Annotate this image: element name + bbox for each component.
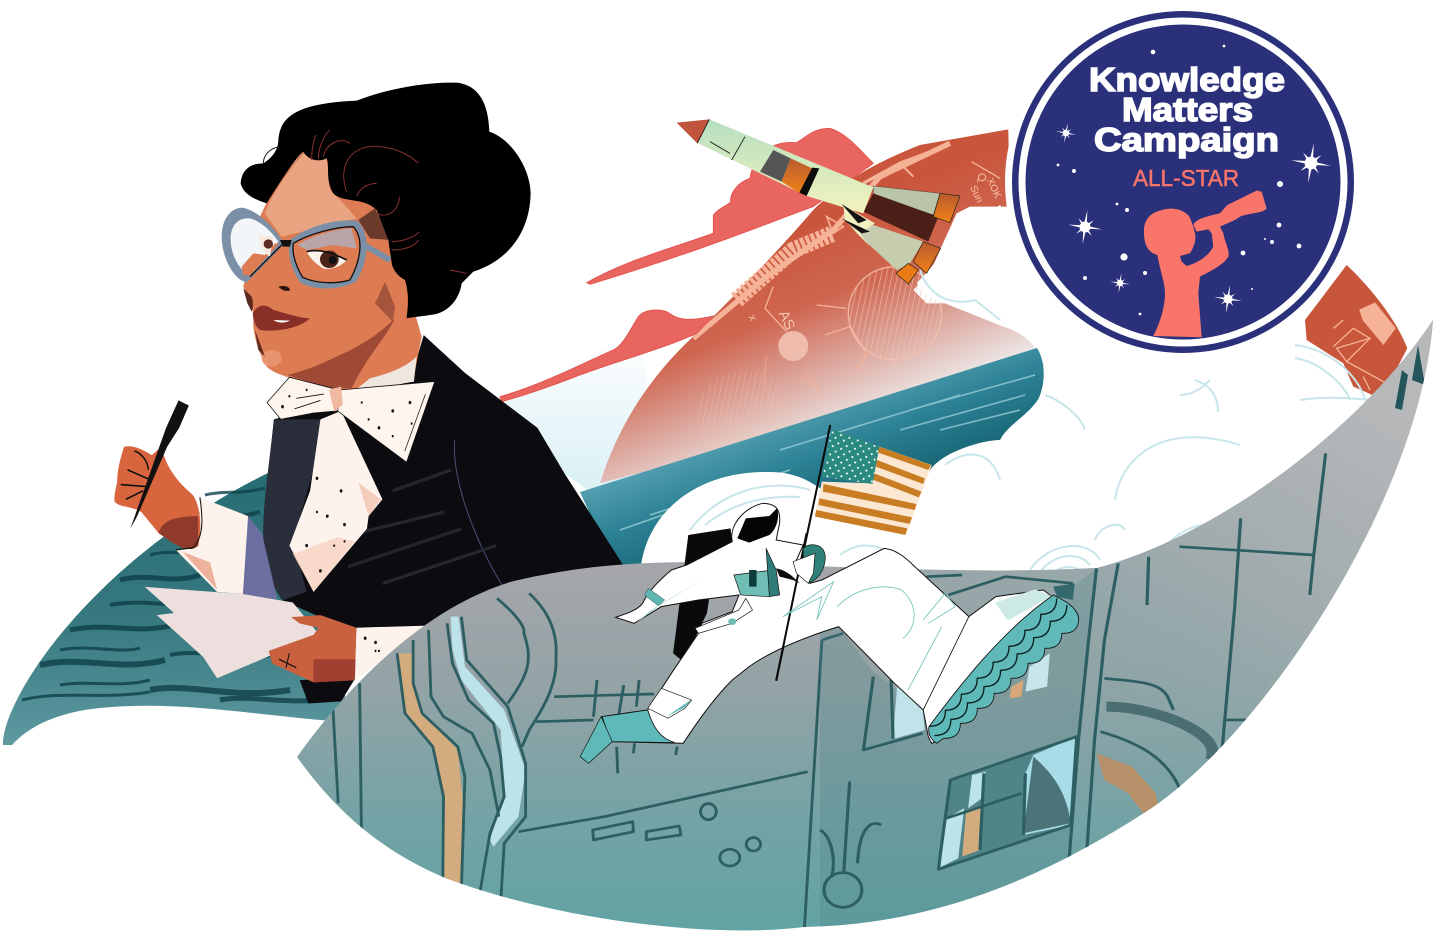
helmet visor: [737, 508, 778, 543]
panel: city map swoosh: [280, 310, 1440, 940]
right district buildings: [820, 453, 1326, 933]
all-star label: ALL-STAR: [1133, 165, 1239, 191]
jacket: [263, 335, 627, 703]
badge stars: [1054, 45, 1334, 315]
upper windows: [893, 583, 1075, 739]
suit shading: [783, 582, 955, 690]
white cuff and purple lining: [176, 497, 277, 599]
head: [222, 83, 531, 392]
map letters: x: [746, 313, 759, 323]
lower boot: [580, 688, 692, 763]
bow collar: [267, 377, 435, 462]
suit: [602, 503, 1057, 743]
child with telescope silhouette: [1144, 191, 1267, 337]
flag pole: [776, 425, 830, 681]
badge title: Knowledge: [1089, 61, 1285, 98]
badge: [1005, 4, 1361, 360]
trees at the tip: [1395, 345, 1425, 410]
hand holding pen: [114, 400, 202, 550]
pink smoke trails: [500, 128, 873, 402]
hair highlights: [263, 130, 467, 273]
panel: pale sky behind the mountain: [500, 330, 660, 492]
lower window: [938, 737, 1077, 869]
map letters: XOK: [984, 177, 1003, 201]
lower hand and cuff: [269, 615, 427, 682]
badge title: Matters: [1122, 91, 1253, 128]
badge title: [1089, 61, 1285, 158]
boot ankle line: [923, 617, 969, 710]
body and clothes: [114, 335, 627, 703]
hair: [241, 83, 531, 318]
panel: woman mathematician: [114, 83, 627, 703]
badge title: Campaign: [1094, 121, 1279, 158]
badge rings: [1005, 4, 1361, 360]
backpack: [673, 528, 732, 662]
map letters: Sun: [967, 184, 985, 205]
left district roads and river: [333, 593, 843, 933]
glove: [793, 545, 825, 583]
flag: [815, 429, 932, 535]
map letters: AS: [775, 308, 798, 333]
cloud mass: [640, 205, 1375, 580]
sheet of paper: [145, 587, 319, 678]
astronaut with flag: [580, 425, 1079, 763]
panel: red map patch on right: [1305, 265, 1407, 398]
pen: [130, 400, 189, 529]
lips: [253, 306, 310, 331]
map letters: Q: [974, 171, 989, 184]
glasses: [222, 208, 390, 288]
hatched map circles: [697, 267, 942, 463]
rocket: [677, 119, 960, 284]
neck and face: [243, 143, 428, 392]
panel: left ocean swoosh: [3, 472, 345, 745]
big boot sole: [929, 589, 1079, 743]
map letters: [746, 171, 1003, 333]
panel: sea horizon: [580, 348, 1100, 600]
blouse front: [289, 411, 382, 592]
chest pack: [636, 548, 800, 633]
shirt at neck: [353, 357, 417, 392]
map road lines: [693, 143, 1000, 400]
panel: red map mountain: [600, 129, 1045, 483]
flag pole over suit: [776, 533, 807, 681]
